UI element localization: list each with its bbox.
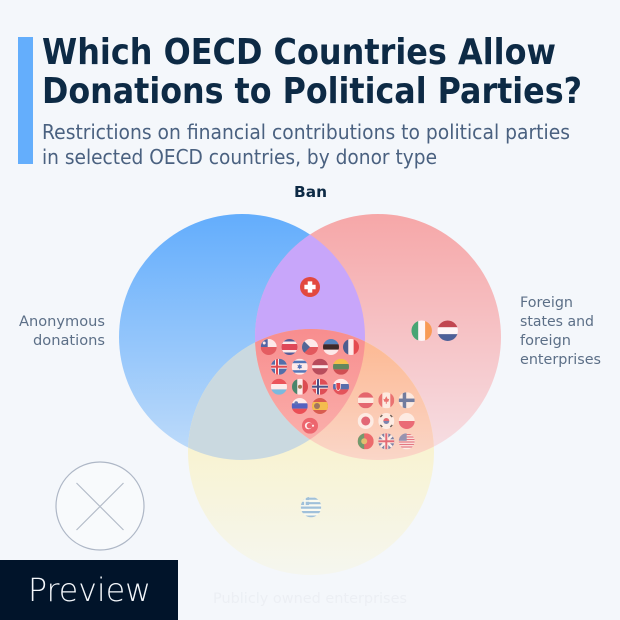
flag: South Korea — [378, 413, 394, 429]
circle: anonymous donations — [119, 214, 365, 460]
flag: Netherlands — [437, 320, 458, 341]
label: foreign states and foreign enterprises: Foreign — [520, 295, 573, 311]
subtitle — [42, 120, 570, 169]
label: anonymous donations: donations — [33, 333, 105, 349]
flag: United States — [399, 433, 415, 449]
watermark: close icon — [56, 462, 144, 550]
flag: Latvia — [312, 359, 328, 375]
label: anonymous donations: Anonymous — [19, 314, 105, 330]
overlap: anonymous and public — [188, 342, 310, 460]
flag: Canada — [378, 392, 394, 408]
accent bar — [18, 37, 33, 164]
label: anonymous donations — [19, 314, 105, 349]
flag: Japan — [358, 413, 374, 429]
overlap: anonymous and foreign — [255, 234, 365, 342]
flag: Spain — [312, 398, 328, 414]
flag: Israel — [292, 359, 308, 375]
flag: Norway — [312, 379, 328, 395]
preview badge — [0, 560, 178, 620]
flag: Mexico — [292, 379, 308, 395]
label: foreign states and foreign enterprises: states and — [520, 314, 594, 330]
flag: Switzerland — [300, 277, 320, 297]
flag: Chile — [261, 339, 277, 355]
venn diagram — [119, 214, 501, 575]
flag: Turkey — [302, 418, 318, 434]
circle: publicly owned enterprises — [188, 329, 434, 575]
flag: Ireland — [411, 320, 432, 341]
circle: foreign states and enterprises — [255, 214, 501, 460]
flags: foreign and public ban — [358, 392, 415, 449]
subtitle: in selected OECD countries, by donor type — [42, 145, 437, 169]
preview badge: Preview — [28, 571, 151, 609]
overlap: all three — [255, 329, 365, 440]
heading: Ban: Ban — [294, 183, 327, 201]
label: foreign states and foreign enterprises: foreign — [520, 333, 571, 349]
flag: Luxembourg — [271, 379, 287, 395]
flag: Finland — [399, 392, 415, 408]
flag: Poland — [399, 413, 415, 429]
flag: Slovenia — [292, 398, 308, 414]
flag: Czechia — [302, 339, 318, 355]
flag: Austria — [358, 392, 374, 408]
flag: Greece — [301, 497, 321, 517]
flag: Estonia — [323, 339, 339, 355]
flag: Iceland — [271, 359, 287, 375]
flag: Costa Rica — [282, 339, 298, 355]
flag: Slovakia — [333, 379, 349, 395]
title — [42, 32, 582, 112]
label: foreign states and foreign enterprises: enterprises — [520, 352, 601, 368]
subtitle: Restrictions on financial contributions to political parties — [42, 120, 570, 144]
flag: Lithuania — [333, 359, 349, 375]
flags: banned on all three — [261, 339, 359, 434]
flag: Portugal — [358, 433, 374, 449]
overlap: foreign and public — [255, 329, 434, 460]
flag: United Kingdom — [378, 433, 394, 449]
title: Which OECD Countries Allow — [42, 32, 556, 73]
label: foreign states and foreign enterprises — [520, 295, 601, 368]
flag: France — [343, 339, 359, 355]
label: publicly owned enterprises: Publicly owned enterprises — [213, 591, 407, 607]
